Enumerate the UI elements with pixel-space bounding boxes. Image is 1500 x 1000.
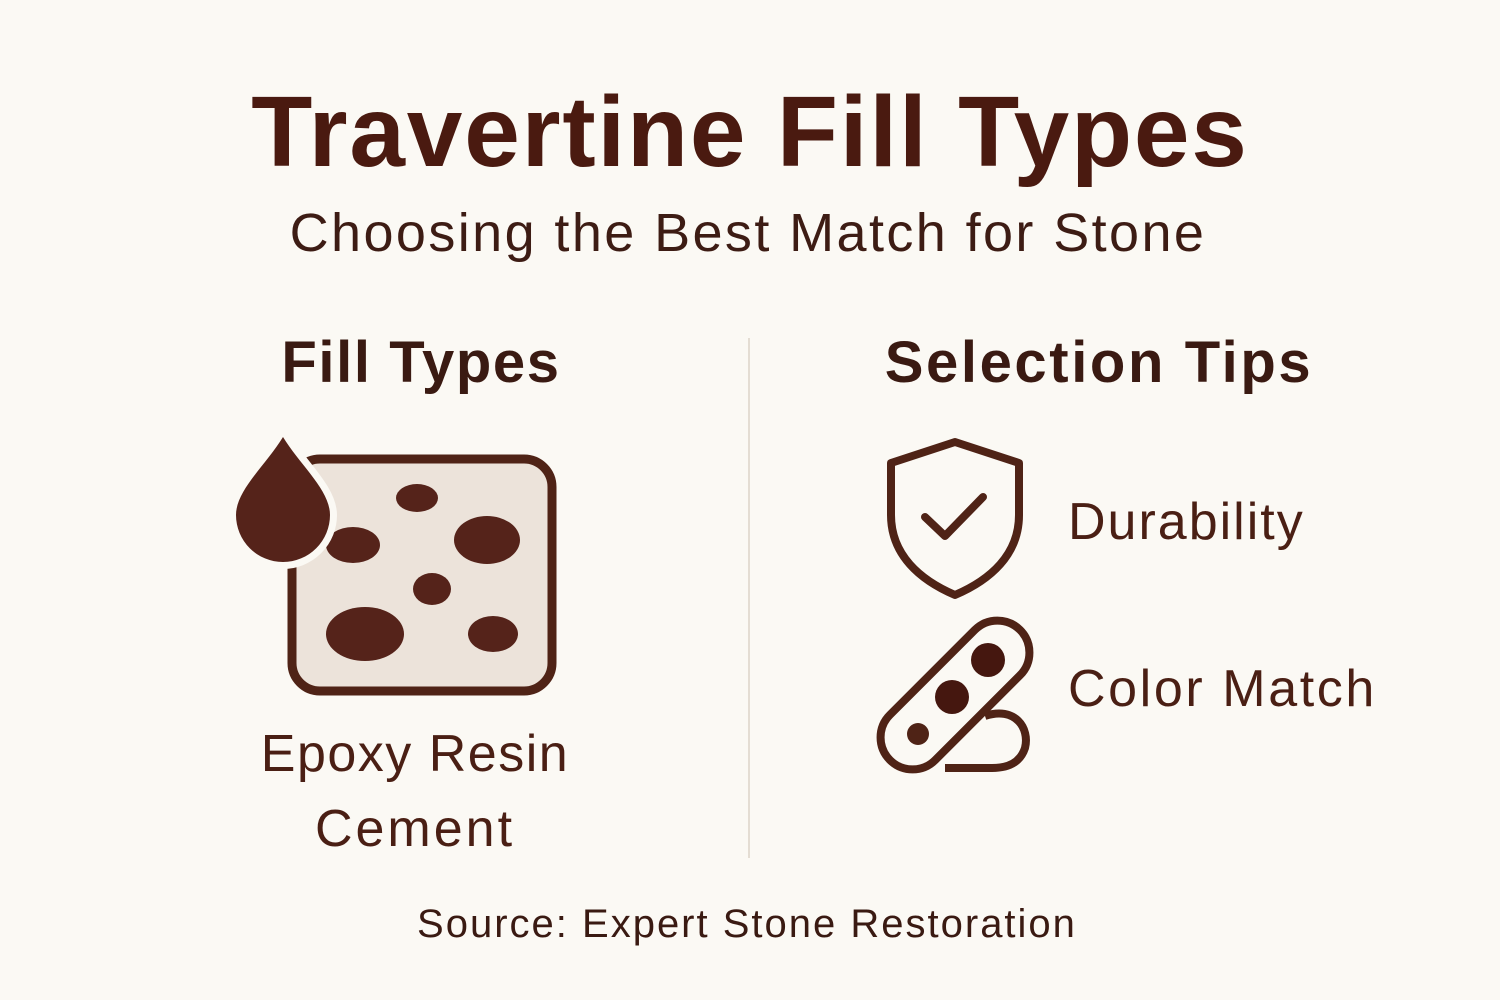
divider bbox=[748, 338, 750, 858]
heading: selection tips: Selection Tips bbox=[885, 330, 1313, 395]
text: cement: Cement bbox=[315, 800, 515, 858]
icon: color palette bbox=[876, 616, 1034, 774]
source: Source: Expert Stone Restoration bbox=[417, 902, 1077, 946]
subtitle: Choosing the Best Match for Stone bbox=[290, 203, 1206, 263]
heading: fill types: Fill Types bbox=[281, 330, 561, 395]
text: epoxy resin: Epoxy Resin bbox=[261, 725, 569, 783]
text: durability: Durability bbox=[1068, 493, 1305, 551]
title: Travertine Fill Types bbox=[251, 76, 1249, 188]
text: color match: Color Match bbox=[1068, 660, 1377, 718]
icon: shield check bbox=[887, 438, 1023, 599]
